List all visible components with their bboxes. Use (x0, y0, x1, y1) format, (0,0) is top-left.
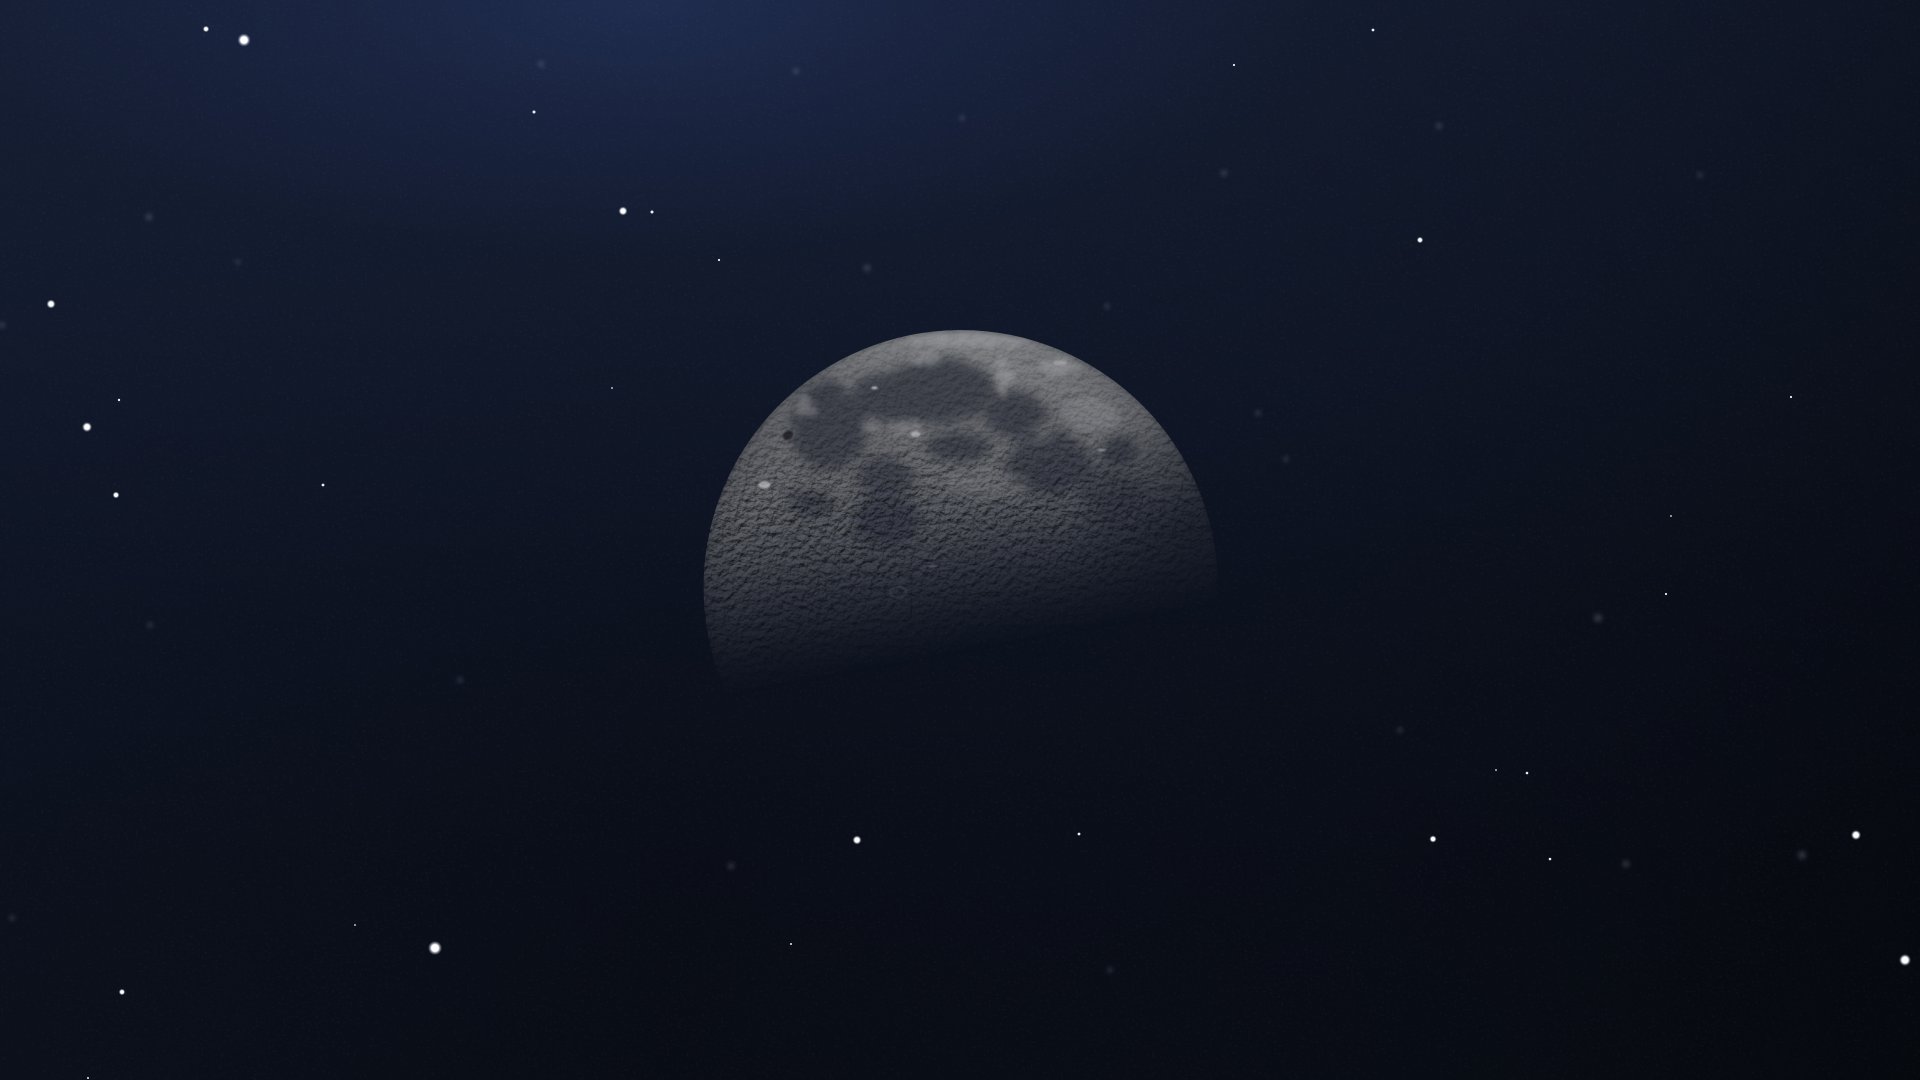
faint blurred distant stars (0, 61, 1806, 973)
surface relief texture (704, 330, 1210, 654)
crater: Grimaldi dark spot (782, 430, 794, 441)
moon (704, 330, 1215, 664)
bright highlands (797, 333, 1120, 499)
bright surface speckle (734, 490, 1032, 562)
lunar maria: dark seas (788, 357, 1140, 547)
bright crater spots (759, 361, 1106, 567)
crater: Tycho ring and rays (833, 586, 907, 620)
moon base disc (704, 330, 1199, 662)
limb and right-side shading (704, 330, 1216, 634)
